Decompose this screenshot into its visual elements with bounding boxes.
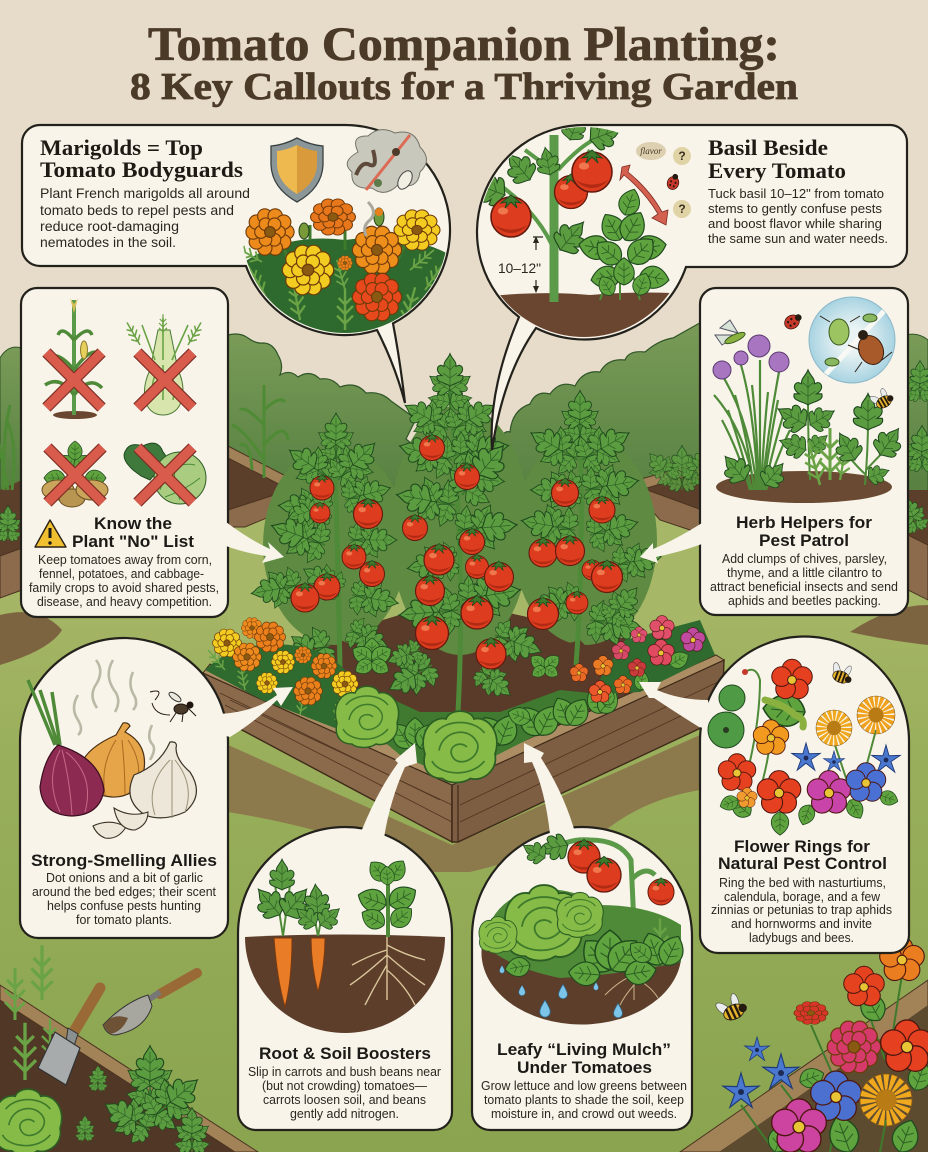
heading and text: flowers: zinnias or petunias to trap aphids: [711, 902, 892, 917]
heading and text: marigolds: tomato beds to repel pests and: [40, 202, 234, 218]
title: 8 Key Callouts for a Thriving Garden: [130, 66, 798, 108]
question marks: [673, 147, 691, 218]
heading and text: roots: Slip in carrots and bush beans near: [248, 1064, 442, 1079]
herb soil: [716, 471, 892, 503]
heading and text: flowers: and hornworms and invite: [731, 916, 872, 931]
heading and text: leafy: Leafy “Living Mulch”: [497, 1040, 671, 1059]
arrow: [524, 743, 576, 836]
heading and text: herbs: aphids and beetles packing.: [728, 593, 881, 608]
heading and text: no list: [29, 514, 219, 609]
icon: bee: [867, 385, 896, 413]
bottom left raised bed: [0, 945, 258, 1152]
heading and text: no list: fennel, potatoes, and cabbage-: [39, 566, 204, 581]
bed marigolds: [204, 618, 362, 728]
heading and text: no list: Keep tomatoes away from corn,: [38, 552, 212, 567]
heading and text: marigolds: Tomato Bodyguards: [40, 157, 243, 182]
heading and text: allies: around the bed edges; their scent: [32, 884, 216, 899]
heading and text: basil: Every Tomato: [708, 158, 846, 183]
question marks: ?: [678, 202, 686, 216]
heading and text: herbs: Herb Helpers for: [736, 513, 872, 532]
icon: bean plant: [355, 856, 421, 937]
arrow: [640, 523, 702, 563]
heading and text: marigolds: [40, 135, 250, 250]
main raised bed: [203, 600, 724, 842]
grass lawn: [0, 470, 928, 1152]
heading and text: basil: [708, 135, 888, 246]
flowers: [718, 659, 900, 813]
heading and text: roots: gently add nitrogen.: [290, 1106, 399, 1121]
heading and text: leafy: Under Tomatoes: [517, 1058, 652, 1077]
icon: pest cloud: [347, 130, 426, 236]
heading and text: basil: Tuck basil 10–12" from tomato: [708, 186, 884, 201]
heading and text: no list: disease, and heavy competition.: [37, 594, 212, 609]
bottom right flower garden: [712, 937, 928, 1152]
icon: crossed potato: [42, 441, 108, 507]
heading and text: marigolds: nematodes in the soil.: [40, 234, 176, 250]
heading and text: roots: (but not crowding) tomatoes—: [262, 1078, 427, 1093]
background hedge right: [500, 320, 705, 510]
heading and text: allies: Dot onions and a bit of garlic: [46, 870, 203, 885]
tomato stem and fruit: [518, 833, 674, 925]
heading and text: allies: for tomato plants.: [76, 912, 172, 927]
bed left wall: [203, 673, 452, 842]
background hedge left: [228, 334, 480, 500]
tomato plant center: [377, 354, 549, 712]
heading and text: allies: [31, 851, 217, 927]
heading and text: no list: Know the: [94, 514, 172, 533]
heading and text: leafy: Grow lettuce and low greens between: [481, 1078, 687, 1093]
side beds: [0, 480, 928, 600]
icon: fly: [150, 691, 196, 722]
heading and text: flowers: Flower Rings for: [734, 837, 870, 856]
panel: marigolds: [22, 125, 450, 403]
heading and text: roots: [248, 1044, 442, 1121]
icon: ladybug: [665, 172, 682, 191]
side greenery: [0, 360, 928, 542]
bed right wall: [452, 660, 724, 842]
question marks: ?: [678, 149, 686, 163]
icon: ladybug: [782, 310, 805, 332]
hand trowel tool: [38, 988, 100, 1085]
icon: roots: [350, 937, 425, 1005]
heading and text: no list: Plant "No" List: [72, 532, 194, 551]
heading and text: leafy: moisture in, and crowd out weeds.: [491, 1106, 677, 1121]
bottom right raised bed: [680, 980, 928, 1152]
icon: chives: [713, 335, 792, 492]
title: [130, 18, 798, 108]
back raised bed right: [628, 462, 702, 534]
heading and text: herbs: attract beneficial insects and send: [710, 579, 898, 594]
flavor bubble: [636, 142, 666, 160]
heading and text: leafy: [481, 1040, 687, 1121]
heading and text: basil: stems to gently confuse pests: [708, 201, 882, 216]
panel: plant no list: [21, 288, 284, 617]
spacing dimension 10–12 inches: 10–12": [498, 261, 541, 276]
soil cross-section: [245, 934, 445, 1033]
icon: pest bubble: [809, 297, 895, 383]
tomato plant canopy shade: [263, 405, 657, 655]
panel: herb helpers: [640, 288, 909, 615]
basil plant: [577, 186, 671, 300]
heading and text: herbs: Pest Patrol: [759, 531, 849, 550]
arrow: [639, 682, 712, 730]
bed flowers: [570, 616, 715, 707]
arrow: [220, 687, 293, 737]
heading and text: flowers: Natural Pest Control: [718, 854, 887, 873]
spacing dimension 10–12 inches: [498, 236, 543, 293]
heading and text: herbs: [710, 513, 898, 608]
heading and text: flowers: [711, 837, 892, 945]
garden herbs bottom left: [5, 945, 58, 1080]
heading and text: herbs: thyme, and a little cilantro to: [727, 565, 882, 580]
panel: leafy living mulch: [472, 743, 692, 1130]
bed soil: [205, 600, 722, 785]
icon: garlic cloves: [93, 808, 148, 838]
bed basil: [349, 638, 563, 680]
panel: strong-smelling allies: [20, 638, 293, 938]
icon: carrots: [248, 859, 346, 1007]
panel: flower rings: [639, 636, 909, 953]
heading and text: no list: family crops to avoid shared pests,: [29, 580, 219, 595]
icon: crossed corn: [45, 298, 102, 419]
dirt patches: [0, 605, 928, 665]
icon: shield: [271, 138, 323, 202]
garden fork tool: [103, 973, 197, 1035]
bed greens and lettuce: [335, 686, 625, 783]
heading and text: roots: Root & Soil Boosters: [259, 1044, 431, 1063]
lettuce and greens: [479, 885, 689, 987]
arrow: [361, 743, 417, 838]
heading and text: marigolds: reduce root-damaging: [40, 218, 179, 234]
icon: lacewing: [715, 320, 746, 346]
pest confusion arrow: [620, 165, 668, 225]
heading and text: basil: and boost flavor while sharing: [708, 216, 882, 231]
icon: crossed cabbage and broccoli: [124, 443, 206, 504]
icon: parsley: [772, 370, 840, 480]
heading and text: basil: Basil Beside: [708, 135, 828, 160]
icon: warning triangle: [35, 520, 66, 547]
background herbs: [637, 442, 722, 493]
heading and text: flowers: ladybugs and bees.: [749, 930, 854, 945]
side hedges: [0, 347, 22, 490]
icon: bee: [827, 659, 856, 686]
icon: garlic: [130, 742, 196, 818]
heading and text: allies: Strong-Smelling Allies: [31, 851, 217, 870]
heading and text: flowers: Ring the bed with nasturtiums,: [719, 875, 886, 890]
tomato and basil illustration: [483, 127, 670, 337]
bee: [712, 990, 750, 1025]
lawn fill in front of hedges: [228, 490, 700, 640]
arrow: [226, 522, 284, 563]
heading and text: roots: carrots loosen soil, and beans: [263, 1092, 426, 1107]
scent lines: [74, 660, 154, 760]
heading and text: flowers: calendula, borage, and a few: [724, 889, 881, 904]
soil cross-section with water: [481, 945, 681, 1025]
heading and text: leafy: tomato plants to shade the soil, keep: [484, 1092, 684, 1107]
panel: basil: [466, 110, 907, 450]
flavor bubble: flavor: [640, 146, 662, 156]
icon: yellow onion: [80, 723, 145, 797]
icon: red onion: [28, 680, 104, 816]
icon: thyme: [800, 428, 854, 487]
seedlings: [73, 1046, 216, 1152]
tomato plant left: [247, 413, 402, 690]
marigold flower bed illustration: [243, 198, 446, 333]
title: Tomato Companion Planting:: [148, 18, 780, 71]
heading and text: herbs: Add clumps of chives, parsley,: [722, 551, 887, 566]
heading and text: marigolds: Marigolds = Top: [40, 135, 203, 160]
icon: caterpillar on leaf: [762, 693, 806, 728]
heading and text: allies: helps confuse pests hunting: [47, 898, 201, 913]
panel: root and soil boosters: [238, 743, 452, 1130]
icon: cilantro: [829, 394, 909, 486]
background corn: [232, 385, 288, 478]
back raised bed left: [228, 446, 305, 527]
icon: crossed fennel: [123, 314, 205, 415]
heading and text: basil: the same sun and water needs.: [708, 231, 888, 246]
tomato plant right: [517, 391, 665, 665]
heading and text: marigolds: Plant French marigolds all around: [40, 185, 250, 201]
flower stems and foliage: [708, 669, 900, 835]
